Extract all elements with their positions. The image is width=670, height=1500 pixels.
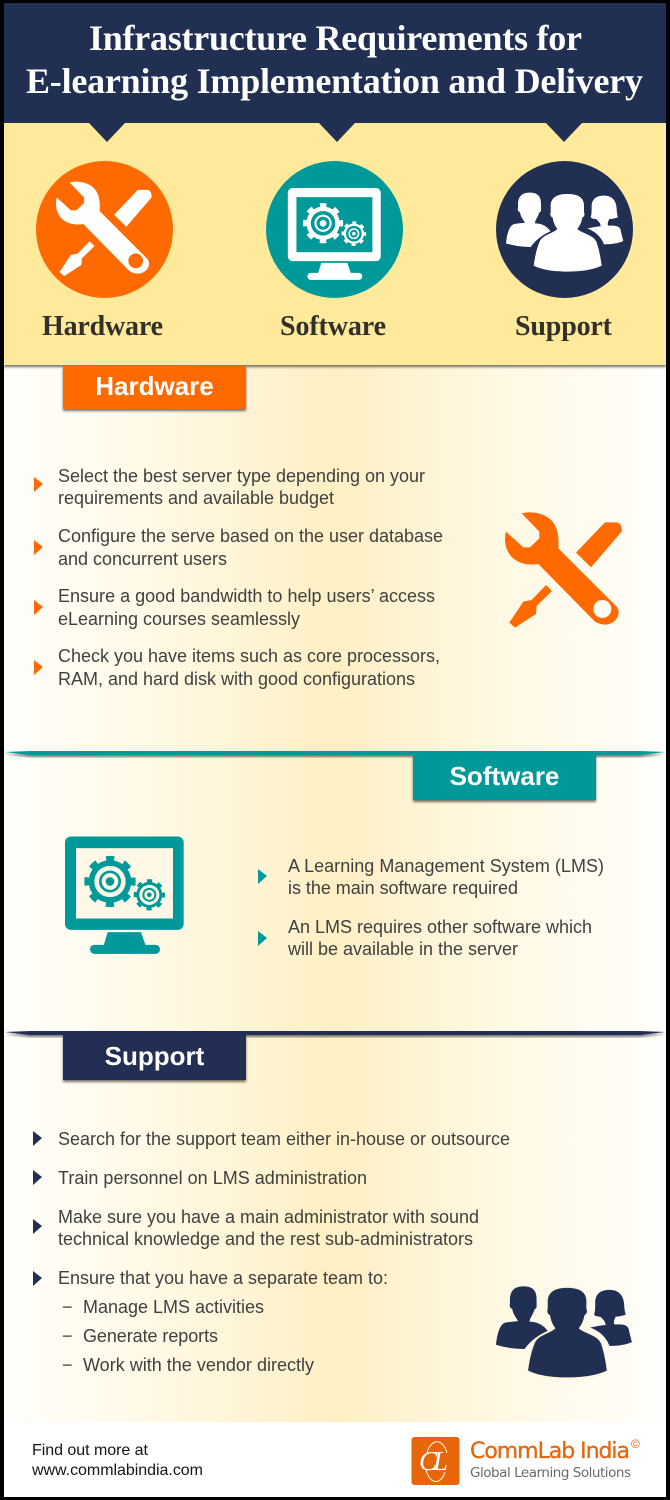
heading tag: software: Software bbox=[450, 761, 559, 791]
footer: find out more bbox=[31, 1442, 203, 1479]
title line 2: E-learning Implementation and Delivery bbox=[26, 61, 643, 101]
heading tag: support: Support bbox=[105, 1041, 205, 1071]
bullet list: support: Manage LMS activities bbox=[83, 1297, 264, 1317]
bullet list: support: Generate reports bbox=[83, 1326, 218, 1346]
label: support: Support bbox=[515, 311, 613, 342]
bullet list: software: An LMS requires other software which bbox=[288, 917, 592, 937]
logo: CommLab India: Global Learning Solutions bbox=[470, 1465, 631, 1481]
panel: software section bbox=[5, 751, 665, 959]
logo: CommLab India bbox=[412, 1437, 640, 1485]
heading tag: hardware: Hardware bbox=[95, 371, 214, 401]
footer: find out more: www.commlabindia.com bbox=[31, 1462, 203, 1479]
bullet list: hardware: Select the best server type depending on your bbox=[58, 466, 425, 486]
bullet list: software: A Learning Management System (LMS) bbox=[288, 856, 604, 876]
bullet list: support: Ensure that you have a separate team to: bbox=[58, 1268, 388, 1288]
logo: CommLab India: CommLab India bbox=[470, 1439, 630, 1464]
icon: wrench and screwdriver bbox=[505, 512, 622, 628]
panel: support section bbox=[5, 1031, 665, 1377]
bullet list: support: technical knowledge and the rest sub-administrators bbox=[58, 1229, 473, 1249]
icon: monitor with gears bbox=[65, 836, 184, 954]
label: hardware: Hardware bbox=[42, 311, 163, 342]
bullet list: support: Search for the support team either in-house or outsource bbox=[58, 1129, 510, 1149]
bullet list: support: Train personnel on LMS administration bbox=[58, 1168, 367, 1188]
logo: CommLab India: © bbox=[631, 1437, 640, 1451]
bullet list: support: − bbox=[62, 1297, 73, 1317]
content background gradient bbox=[4, 365, 666, 1422]
icon: support team bbox=[496, 1286, 632, 1377]
heading tag: support bbox=[63, 1035, 246, 1080]
heading tag: hardware bbox=[63, 366, 246, 409]
icon: software circle bbox=[266, 161, 403, 298]
bullet list: support: − bbox=[62, 1326, 73, 1346]
title line 1: Infrastructure Requirements for bbox=[89, 18, 582, 58]
heading tag: software bbox=[413, 755, 596, 800]
icon: support circle bbox=[496, 161, 633, 298]
bullet list: hardware: Check you have items such as core processors, bbox=[58, 646, 440, 666]
bullet list: hardware: RAM, and hard disk with good configurations bbox=[58, 669, 415, 689]
footer: find out more: Find out more at bbox=[32, 1442, 149, 1459]
panel: hardware section bbox=[34, 366, 622, 689]
bullet list: software bbox=[258, 856, 604, 959]
bullet list: software: will be available in the server bbox=[287, 939, 518, 959]
bullet list: software: is the main software required bbox=[288, 878, 518, 898]
bullet list: hardware: requirements and available budget bbox=[58, 488, 334, 508]
bullet list: hardware bbox=[34, 466, 443, 689]
panel: title banner bbox=[4, 3, 666, 142]
bullet list: hardware: Ensure a good bandwidth to help users’ access bbox=[58, 586, 435, 606]
logo: CommLab India: CL bbox=[419, 1446, 448, 1476]
bullet list: support: Work with the vendor directly bbox=[83, 1355, 314, 1375]
bullet list: hardware: and concurrent users bbox=[58, 549, 227, 569]
label: software: Software bbox=[280, 311, 386, 342]
bullet list: hardware: Configure the serve based on the user database bbox=[58, 526, 443, 546]
bullet list: support: Make sure you have a main administrator with sound bbox=[58, 1207, 479, 1227]
icon: hardware circle bbox=[36, 161, 173, 298]
bullet list: hardware: eLearning courses seamlessly bbox=[58, 609, 300, 629]
panel: yellow overview band bbox=[4, 123, 666, 365]
bullet list: support bbox=[33, 1129, 510, 1375]
bullet list: support: − bbox=[62, 1355, 73, 1375]
